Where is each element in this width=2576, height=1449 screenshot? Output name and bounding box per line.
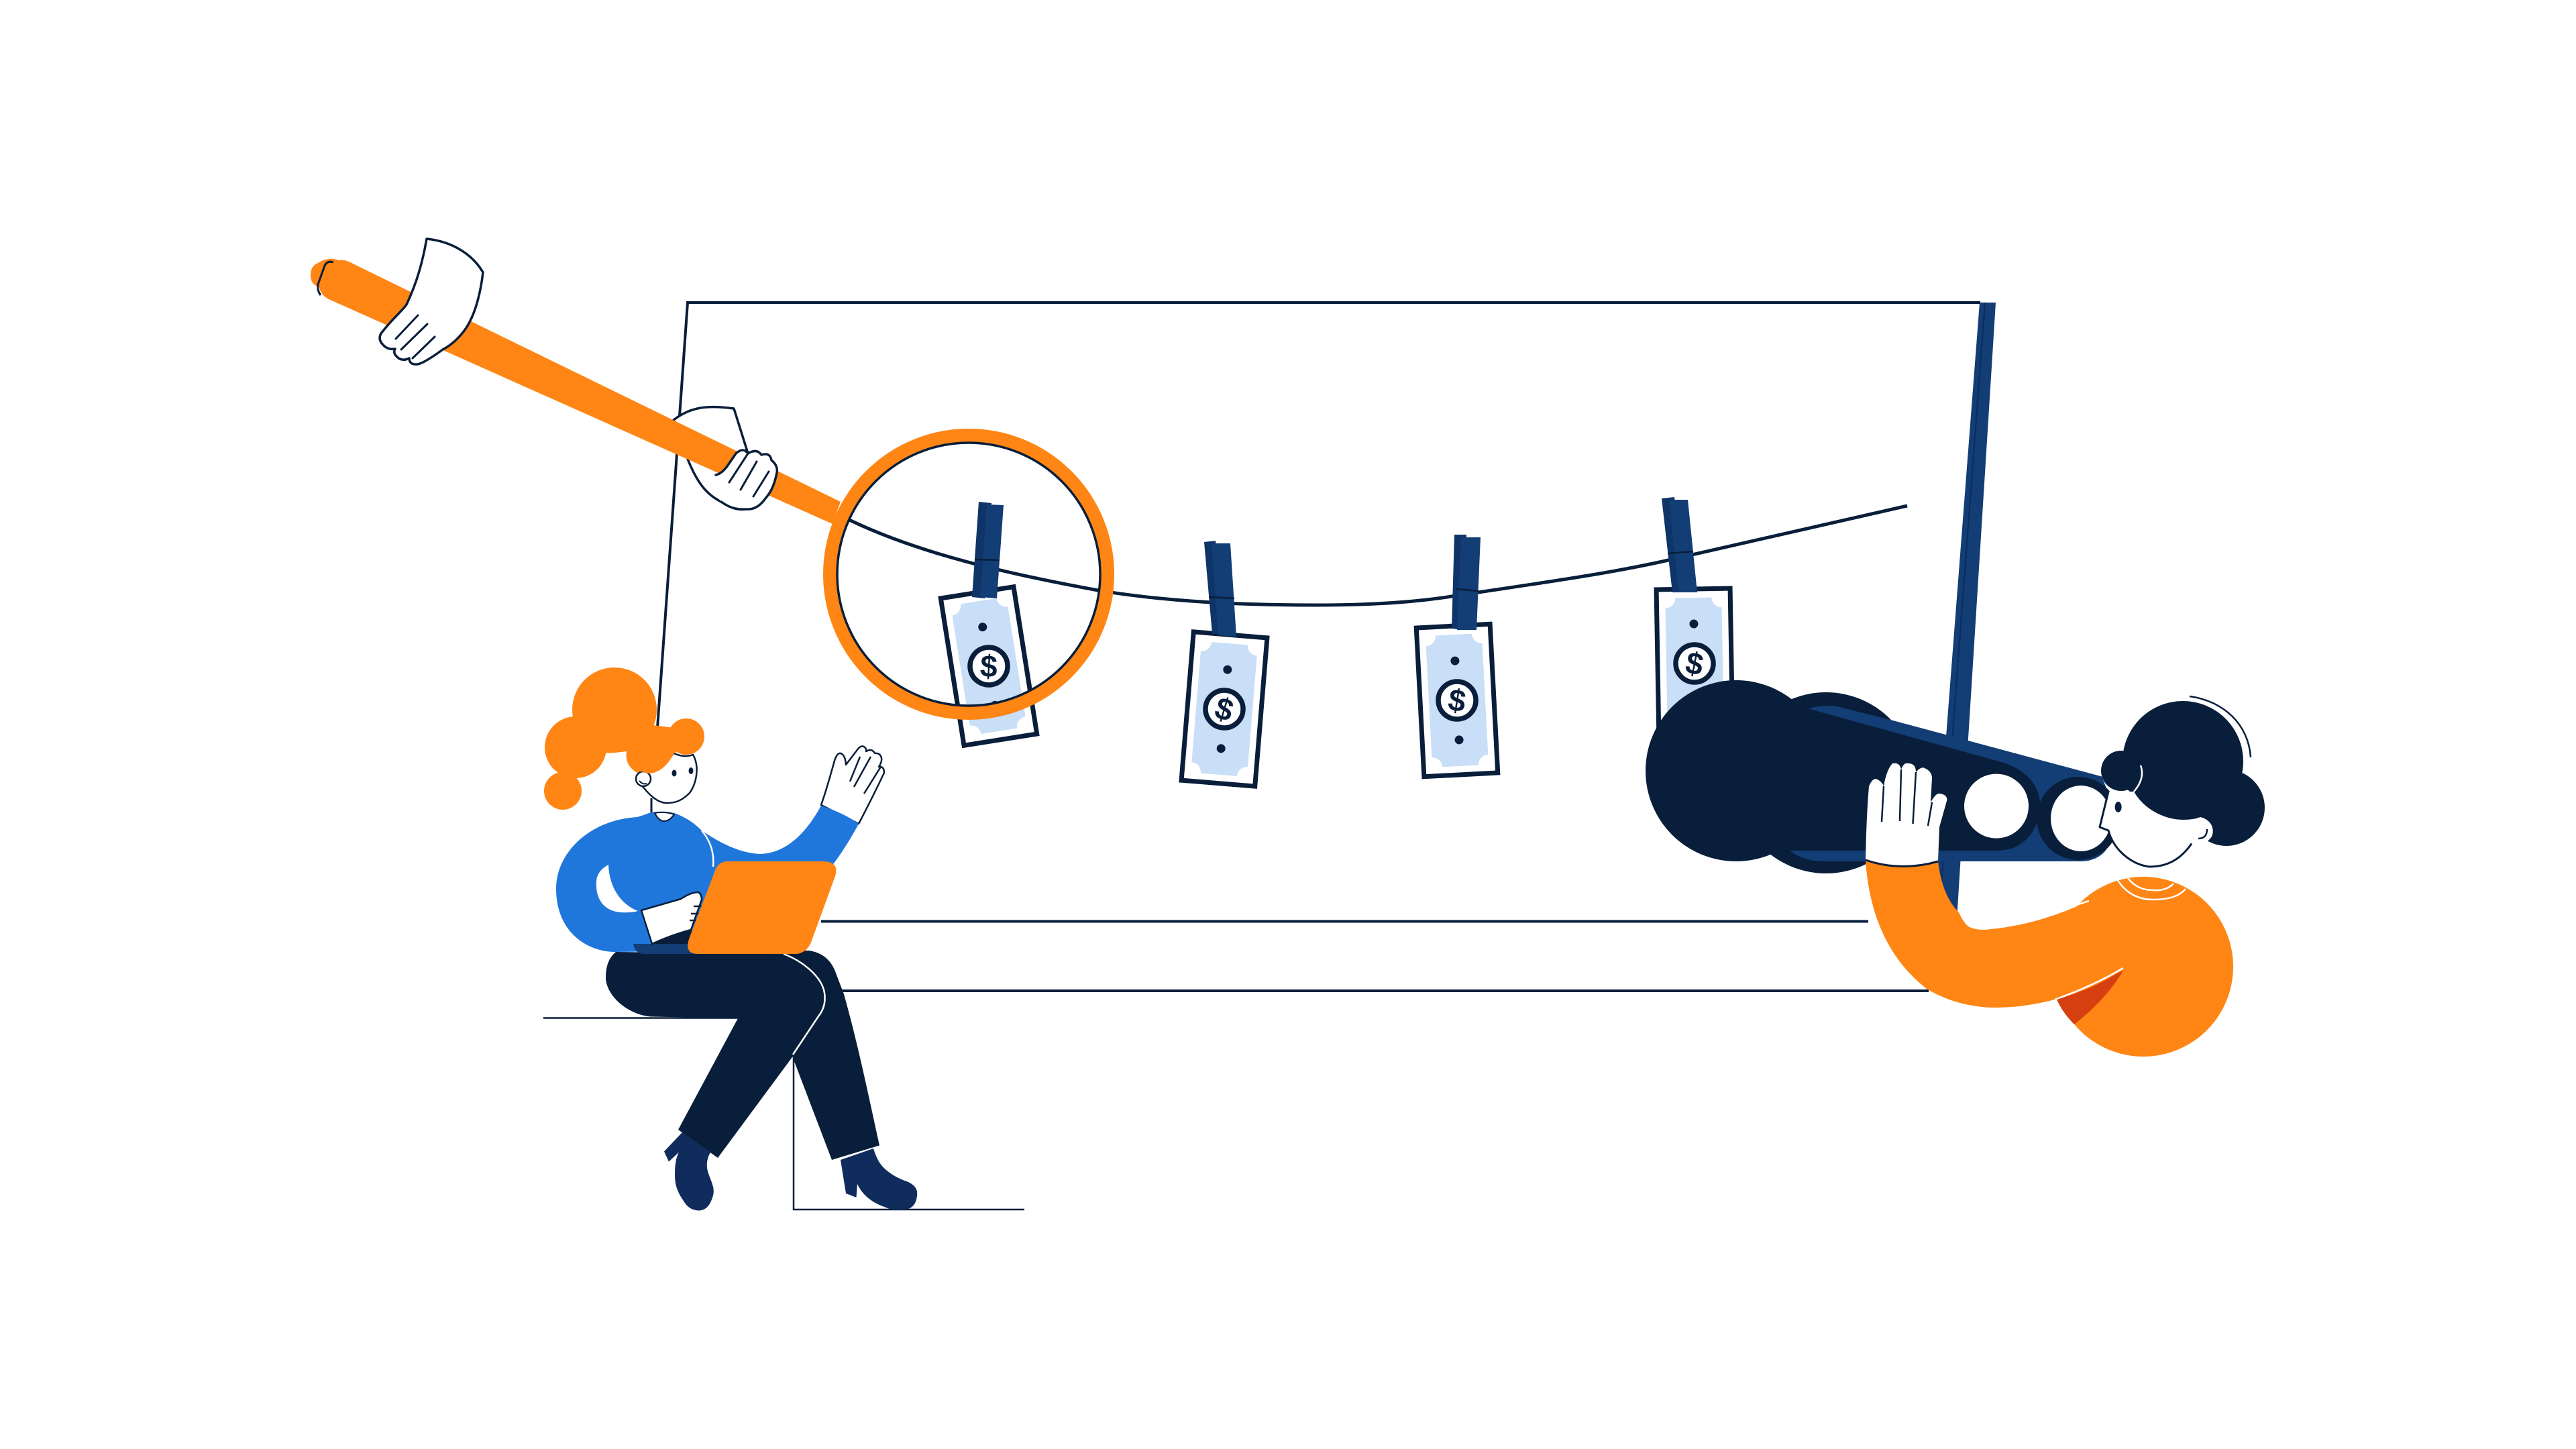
shirt highlights [2055, 878, 2186, 1000]
board frame lines [657, 303, 1980, 991]
knee highlight [784, 954, 825, 1055]
bank note 4 [1656, 588, 1733, 739]
typing hand [641, 892, 703, 944]
bank note 3: $ [1446, 682, 1468, 719]
face [2100, 792, 2213, 867]
board right post [1932, 303, 1996, 919]
lens 1 [1964, 774, 2029, 839]
back hand sleeve [673, 407, 755, 510]
motion arc [2190, 696, 2251, 757]
upper hand on handle [380, 239, 483, 364]
bank note 4: $ [1682, 645, 1707, 682]
bank note 2: $ [1211, 690, 1238, 729]
bank note 1 [941, 587, 1037, 745]
sweater shoulder line [702, 830, 713, 867]
binocular barrel dark top [1771, 698, 2040, 851]
clothespin 3 [1452, 535, 1481, 630]
neck [651, 798, 652, 812]
laptop base [633, 944, 711, 954]
bank note 3 [1416, 624, 1498, 777]
person with binoculars [1646, 680, 2265, 1057]
face outline [2100, 792, 2192, 867]
lower hand fingers on handle [706, 450, 777, 509]
binocular barrel [1790, 706, 2114, 861]
ring inner line [837, 443, 1100, 706]
arm [1866, 861, 2133, 1008]
eyes [672, 767, 694, 777]
seat and step lines [543, 1018, 1024, 1210]
eye [2115, 802, 2122, 812]
collar [655, 812, 674, 821]
clothespin 2 [1204, 541, 1236, 637]
right boot [841, 1148, 917, 1210]
face [641, 753, 697, 803]
binocular front lobes [1646, 680, 1917, 873]
hair strand [2134, 765, 2142, 792]
ear detail [2198, 829, 2207, 839]
hair [544, 667, 704, 810]
lens 2 [2051, 786, 2111, 851]
lap shadow [652, 929, 698, 944]
hand on binoculars [1866, 763, 1947, 867]
shirt shadow [2057, 971, 2123, 1024]
back leg [771, 951, 879, 1160]
handle [311, 259, 841, 524]
laptop [688, 861, 836, 954]
hair [2101, 701, 2265, 846]
raised hand [821, 746, 884, 824]
clothesline rope [849, 506, 1907, 605]
ring [830, 435, 1108, 713]
ear [636, 771, 651, 786]
handle end mark [318, 262, 333, 295]
arm gap [596, 865, 638, 912]
clothespin 4 [1662, 497, 1697, 592]
eyepiece [2037, 777, 2120, 860]
front leg [606, 952, 825, 1158]
torso [2053, 877, 2233, 1057]
magnifying glass [311, 259, 1108, 713]
clothespin 1 [972, 502, 1004, 598]
bank note 1: $ [979, 648, 998, 684]
left boot [664, 1132, 714, 1210]
seated woman with laptop [544, 667, 917, 1210]
bank note 2 [1181, 632, 1267, 786]
sweater [556, 806, 859, 953]
